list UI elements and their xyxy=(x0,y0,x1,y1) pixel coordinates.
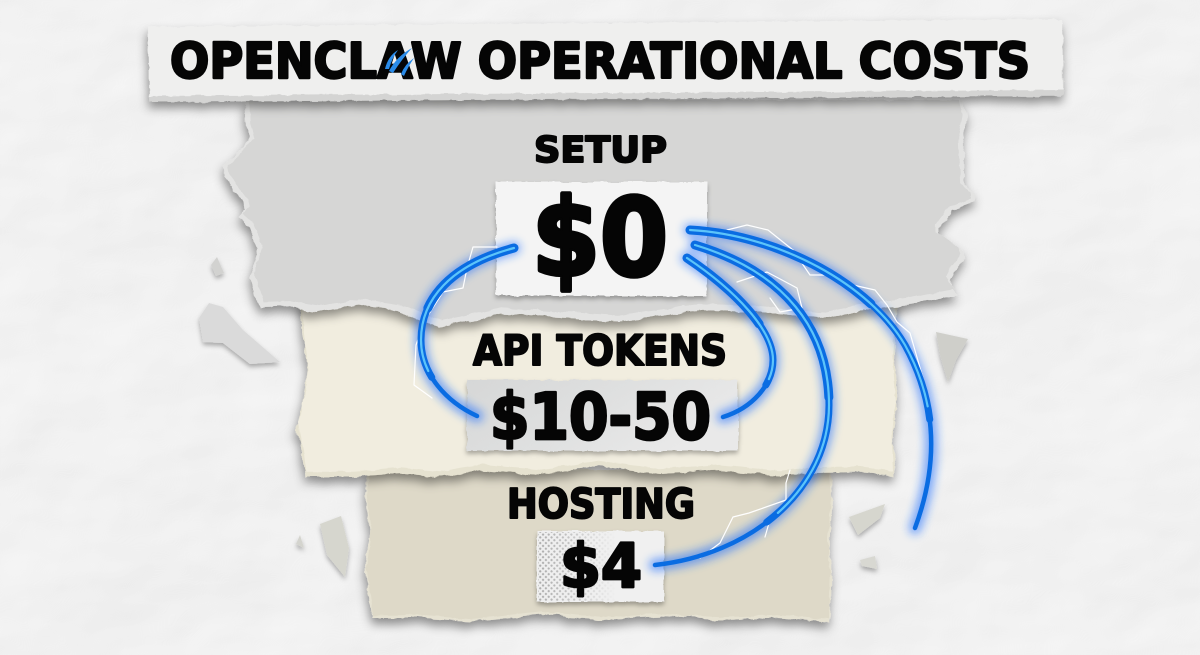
full-length thin blue stroke xyxy=(421,230,931,565)
infographic canvas xyxy=(140,19,1069,634)
torn paper debris xyxy=(199,257,968,577)
value: $10-50: $10-50 xyxy=(490,381,711,455)
lightning xyxy=(414,225,925,558)
panel: api tokens xyxy=(297,300,898,477)
inner light stroke xyxy=(421,230,931,565)
chip: hosting price xyxy=(537,531,664,602)
panel: setup xyxy=(223,100,975,327)
thicker blue stroke on first three-quarters xyxy=(421,230,931,565)
chip: setup price xyxy=(496,182,707,296)
neon arcs xyxy=(414,225,931,565)
glow layer xyxy=(421,230,931,565)
icon: claw marks xyxy=(385,48,414,76)
value: $0: $0 xyxy=(532,177,668,301)
panel: hosting xyxy=(365,470,833,622)
heading: setup: SETUP xyxy=(534,130,667,171)
value: $4: $4 xyxy=(560,531,642,602)
title: OPENCLAW OPERATIONAL COSTS xyxy=(170,33,1030,90)
heading: api tokens: API TOKENS xyxy=(473,326,727,375)
heading: hosting: HOSTING xyxy=(507,480,695,528)
panel: title strip xyxy=(148,19,1064,102)
thickest blue stroke near the start xyxy=(421,230,931,565)
chip: api tokens price xyxy=(467,380,738,451)
